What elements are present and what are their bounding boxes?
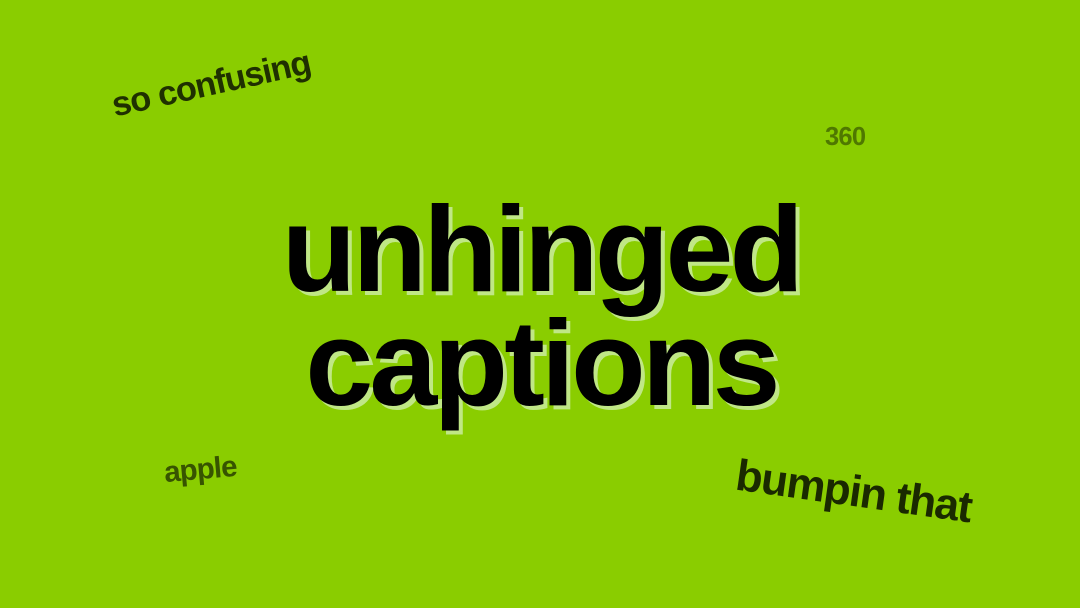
- caption: apple: apple: [162, 450, 237, 489]
- title: unhinged: [282, 181, 800, 317]
- caption: so confusing: so confusing: [108, 43, 314, 124]
- title: [282, 181, 800, 434]
- title: captions: [305, 295, 777, 431]
- caption: 360: 360: [825, 123, 865, 151]
- caption: bumpin that: bumpin that: [733, 450, 974, 532]
